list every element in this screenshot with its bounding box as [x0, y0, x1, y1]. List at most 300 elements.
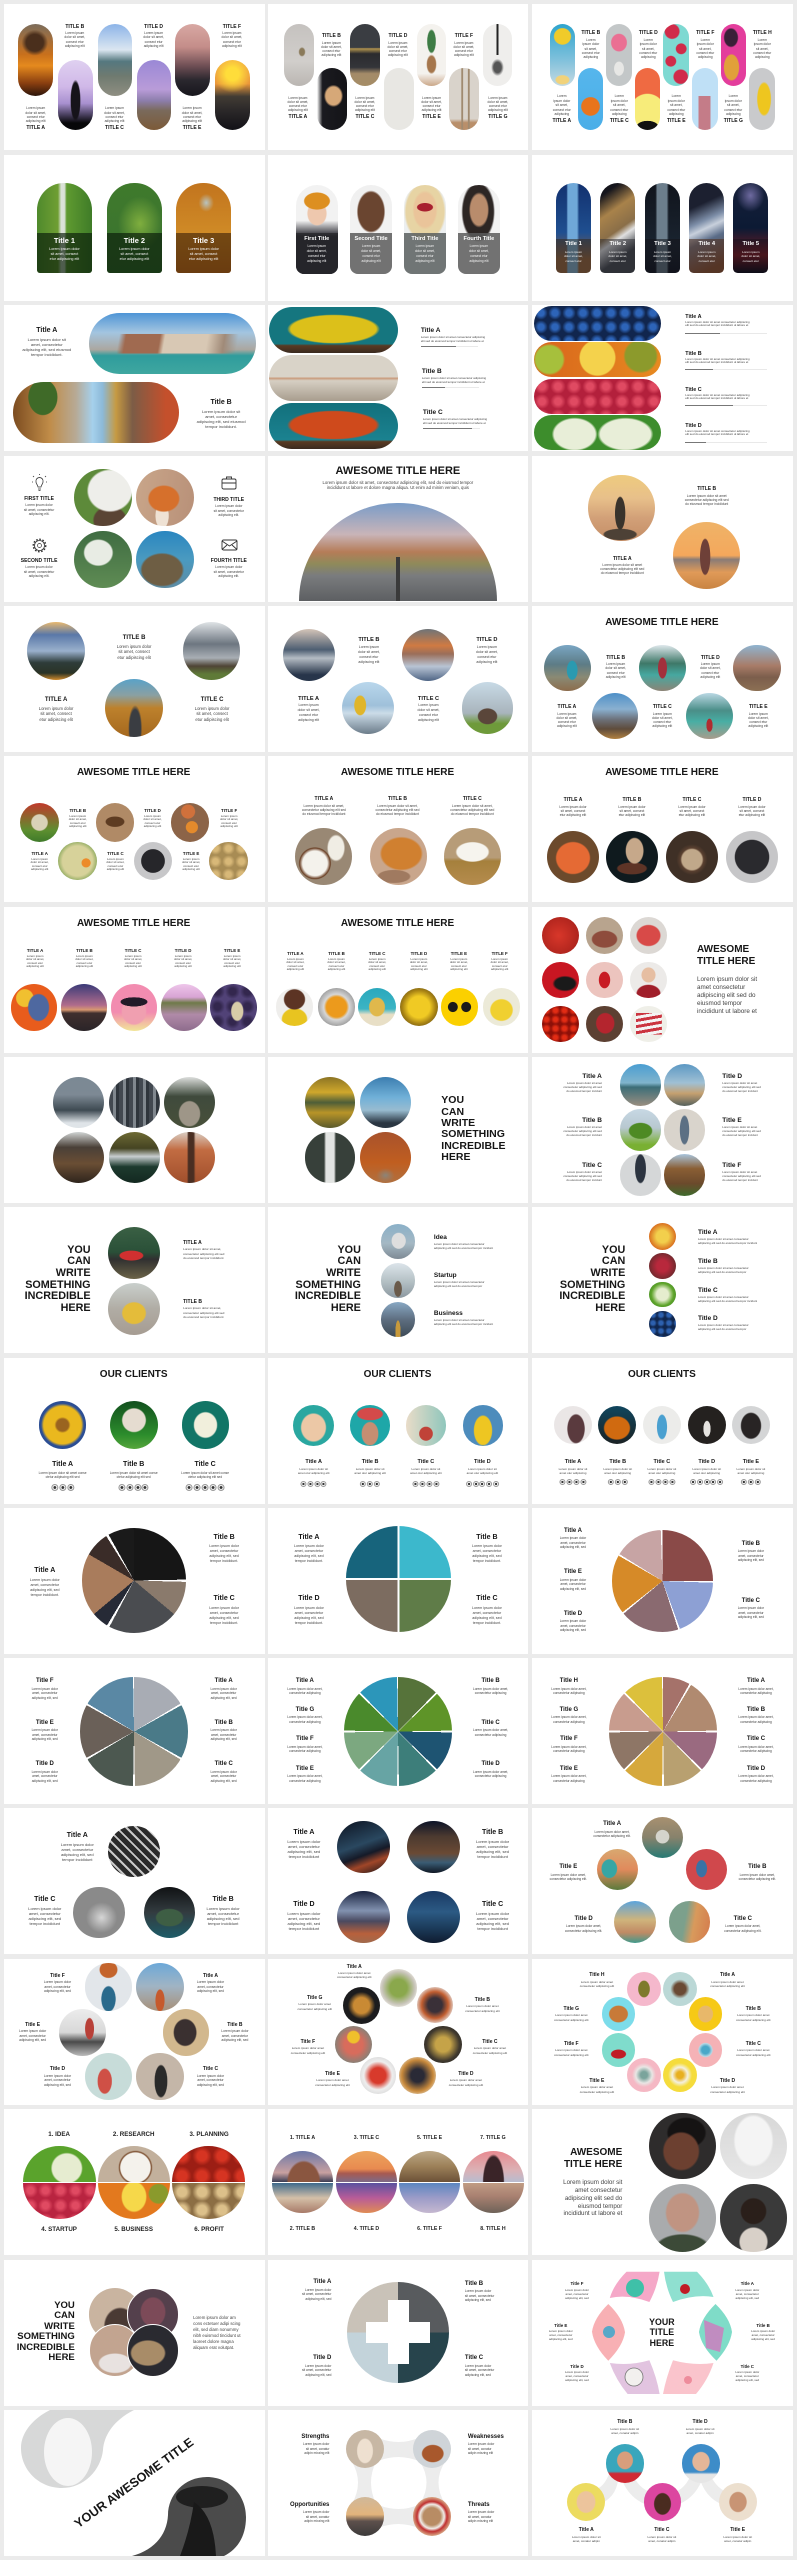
photo: avocado on pink circle [627, 1972, 661, 2006]
text: title E: consect etur [667, 108, 685, 112]
text: title B: consectetur adipiscing elit [465, 2009, 500, 2013]
photo: eggs plate on pink circle [627, 2058, 661, 2092]
text: title C: amet, consectetur [29, 1911, 61, 1916]
chart: petals [532, 2260, 793, 2406]
panel: diagonal title with two portrait blobs [4, 2410, 265, 2556]
text: title E: Title E [730, 2527, 745, 2533]
shape: grey zigzag connectors [532, 2410, 792, 2556]
photo: vespa circle [642, 1817, 683, 1858]
panel: five faces zigzag [532, 2410, 793, 2556]
text: title E: consectetur adipiscing [553, 1779, 585, 1783]
text: title A [698, 1229, 757, 1245]
text: title D: dolor sit amet, [143, 817, 162, 821]
text: title D: amet otur adipiscing elit [467, 1471, 498, 1475]
text: title C: consectetur adipiscing elit [736, 2053, 770, 2057]
photo: smiling man on blue circle [682, 2444, 720, 2483]
text: title C: consect etur [653, 720, 671, 724]
text: title D: adipiscing elit [476, 660, 497, 664]
heading: AWESOME [570, 2147, 622, 2158]
text: title D: consect etur [701, 671, 719, 675]
panel: four portraits with headline [532, 2109, 793, 2255]
text: title B: sit amet, consect [620, 809, 644, 813]
heading: YOU [54, 2300, 75, 2311]
text: title C: Lorem ipsum dolor sit amet consectetur adipiscing [423, 416, 487, 420]
text: title A: do eiusmod tempor incididunt [601, 571, 644, 575]
photo: peak climber circle [592, 693, 638, 739]
text: title D [32, 1761, 58, 1783]
text: title B: adipiscing elit [328, 967, 345, 971]
panel: five traveller circles with heading [532, 606, 793, 752]
text: title E: adipiscing elit, sed [549, 2337, 573, 2341]
text: title G: Lorem ipsum dolor amet [555, 2013, 587, 2017]
photo: rail tracks circle [346, 2497, 384, 2536]
text: title B: amet, consectetur [205, 414, 237, 419]
text: title D: adipiscing elit [410, 967, 428, 971]
text: title B: Title B [698, 1258, 718, 1265]
panel: three architecture circles [4, 1808, 265, 1954]
text: title A [286, 951, 304, 972]
text: title B: Title B [609, 1459, 626, 1465]
text: title A [30, 1567, 60, 1598]
text: title C: Title C [482, 1901, 503, 1908]
text: title B: TITLE B [76, 948, 93, 953]
text: title C: Lorem ipsum [369, 957, 386, 961]
text: title B: Lorem ipsum dolor [117, 644, 151, 649]
text: weaknesses: adipin mixzing elit [468, 2451, 493, 2455]
text: title C: do eiusmod tempor incidunt [566, 1178, 602, 1182]
text: title A: consect etur [299, 713, 318, 717]
text: title B: consect etur [607, 671, 625, 675]
text: title E: TITLE E [224, 948, 240, 953]
arch: autumn trees, title 3 [176, 183, 231, 273]
text: title C [724, 1916, 761, 1933]
text: title B: dolor sit amet, [321, 45, 342, 49]
text: title B: Lorem ipsum [359, 644, 379, 648]
photo: avocado plate circle [380, 1969, 417, 2007]
text: title F: adipiscing elit, sed [565, 2296, 589, 2300]
text: intro [322, 480, 474, 490]
text: title G: Lorem ipsum dolor amet, [287, 1715, 323, 1719]
text: title D: TITLE D [742, 797, 761, 803]
text: title C: sit amet, consectetur [465, 2368, 494, 2372]
arch: blue tower [556, 183, 591, 273]
text: title G: adipiscing [726, 112, 741, 116]
text: title D: consect etur [145, 821, 160, 825]
panel: four mountain circles [268, 606, 528, 752]
text: title B: etur adipiscing elit [619, 813, 645, 817]
text: title H: consect etur [753, 51, 771, 55]
text: title A: Title A [34, 1567, 55, 1574]
text: title D: amet, consectetur [44, 2078, 71, 2082]
text: strengths: Lorem ipsum dolor [303, 2442, 329, 2446]
text: title D: Lorem ipsum [411, 957, 427, 961]
text: title B [603, 1459, 632, 1475]
text: title E: adipiscing elit, sed [32, 1737, 58, 1741]
text: title E: dolor sit amet, [182, 860, 200, 864]
text: title C: dolor sit amet, [368, 960, 386, 964]
text: title B: Lorem ipsum dolor [221, 2029, 249, 2033]
chart: eight slice aerial pie [344, 1677, 452, 1786]
arch: man with sunglasses: Lorem ipsum [362, 244, 380, 248]
photo: orange peaks circle [402, 629, 454, 681]
chart: six slice mountain pie [80, 1677, 188, 1786]
text: title H: ipsum dolor [754, 42, 771, 46]
text: title B: Lorem ipsum dolor sit [202, 409, 240, 414]
text: title B: Lorem ipsum [76, 954, 93, 958]
text: title B [472, 1534, 502, 1564]
arch: man with sunglasses: dolor sit amet, [361, 249, 381, 253]
text: title C: adipiscing elit, sed [28, 1916, 61, 1921]
text: fourth title: sit amet, consectetur [214, 570, 244, 574]
heading [532, 1245, 625, 1315]
text: title E [737, 1459, 765, 1475]
text: title F: amet, consectetur [32, 1691, 57, 1695]
text: title C [417, 696, 439, 723]
text: title A: Title A [565, 1459, 581, 1465]
text: title D: sit amet, consect [740, 809, 764, 813]
text: title B: Lorem ipsum dolor [751, 2329, 775, 2333]
text: title B: Lorem ipsum dolor sit amet [567, 1125, 602, 1129]
text: title D: amet, consectetur [295, 1611, 323, 1615]
text: title D: etur adipiscing elit [739, 813, 765, 817]
text: second title: Lorem ipsum dolor [25, 565, 53, 569]
text: title D: consectetur adipiscing elit sed [722, 1085, 761, 1089]
text: title B: ctetur adipiscing elit sed [117, 1475, 151, 1479]
text: title D: Lorem ipsum dolor sit amet [722, 1081, 757, 1085]
text: title A: Title A [313, 2279, 331, 2285]
heading: INCREDIBLE [295, 1290, 361, 1302]
text: title F [44, 1973, 71, 1994]
photo: pink donut circle [689, 2033, 722, 2067]
text: title C: adipiscing elit [368, 967, 386, 971]
text: title C: Lorem ipsum [355, 96, 374, 100]
text: title B: TITLE B [65, 24, 84, 30]
text: title C: TITLE C [105, 125, 124, 131]
photo: citrus half [98, 2183, 170, 2219]
text: title B [563, 1117, 602, 1137]
photo: plumeria circle [182, 1401, 229, 1449]
text: title A: Lorem ipsum [27, 954, 43, 958]
photo: white hair woman circle [720, 2113, 787, 2179]
text: body: incididunt ut labore et [697, 1008, 757, 1015]
heading: OUR CLIENTS [364, 1369, 431, 1380]
text: title B: TITLE B [328, 951, 345, 956]
photo: strawberry circle [649, 1253, 676, 1279]
text: title G: Title G [560, 1707, 578, 1713]
text: title D: Title D [36, 1761, 54, 1767]
text: title B: amet, consectetur [210, 1549, 238, 1553]
text: title B: adipiscing elit, sed [751, 2337, 775, 2341]
arch: blonde woman with red sunglasses [404, 185, 446, 274]
text: title F: Lorem ipsum [454, 41, 473, 45]
text: title E: TITLE E [667, 118, 686, 124]
photo: mussels plate circle [417, 1987, 453, 2023]
text: title C: Title C [741, 2364, 754, 2369]
text: title D: Lorem ipsum [701, 662, 720, 666]
text: title F [554, 2041, 588, 2057]
text: title C: Title C [213, 1595, 235, 1602]
text: title E: consect etur [224, 961, 240, 965]
photo: coffee on teal circle [663, 1972, 697, 2006]
text: title C: Lorem ipsum [107, 857, 124, 861]
text: title B: Title B [481, 1678, 500, 1684]
text: title C [465, 2355, 494, 2377]
text: title C: Lorem ipsum dolor [28, 1906, 61, 1911]
text: title F: Title F [571, 2281, 583, 2286]
photo: sea cliff half [463, 2183, 524, 2213]
text: title D: Lorem ipsum dolor sit amet consectetur [698, 1323, 749, 1327]
text: title A: Title A [582, 1073, 602, 1080]
text: title B: adipiscing elit, sed [209, 1554, 239, 1558]
text: title C: Lorem ipsum dolor [197, 2074, 224, 2078]
text: title A: Lorem [557, 94, 566, 98]
text: title B: tempor incididunt [477, 1854, 508, 1859]
text: title A: TITLE A [289, 114, 307, 120]
arch: forest, title 2 [107, 183, 162, 273]
text: threats: Lorem ipsum dolor [468, 2510, 494, 2514]
text: title A: amet, consectetur [736, 2292, 759, 2296]
text: title D [710, 2078, 745, 2094]
text: title E: Title E [560, 1766, 578, 1772]
text: title A: adipiscing elit, sed eiusmod [22, 347, 71, 352]
text: title B [75, 948, 93, 969]
photo: red cake circle [586, 1006, 623, 1042]
text: title C: TITLE C [463, 796, 482, 802]
text: startup: Startup [434, 1272, 457, 1279]
text: title C [472, 1595, 502, 1626]
photo: waffle on yellow circle [689, 1997, 722, 2031]
text: title D: amet, consectetur [565, 2374, 588, 2378]
text: title E [549, 2323, 573, 2341]
text: title B: Title B [215, 1720, 233, 1726]
text: title C: Title C [423, 408, 443, 416]
photo: man in tank top circle [720, 2184, 787, 2252]
text: title C: consectetur adipiscing elit [473, 2051, 507, 2055]
photo: pink hair woman circle [111, 984, 157, 1031]
text: title B: Lorem ipsum dolor [209, 1544, 239, 1548]
petal: A cherries [664, 2271, 714, 2302]
text: title F [454, 33, 474, 57]
text: title E: TITLE E [451, 951, 467, 956]
text: title F: Lorem ipsum dolor amet [292, 2046, 324, 2050]
text: title A [337, 1964, 371, 1980]
text: title B: tempor incididunt [208, 1921, 238, 1926]
text: title B: adipiscing elit, sed [221, 2038, 248, 2042]
text: title C [450, 796, 494, 816]
text: title B: adipiscing elit sed do eiusmod tempor [698, 1270, 746, 1274]
text: title A [61, 1832, 94, 1862]
text: title B [736, 2006, 770, 2022]
text: title B: TITLE B [183, 1299, 202, 1305]
text: title D: dolor sit amet, [143, 35, 164, 39]
text: title C: Lorem ipsum dolor sit [648, 2534, 676, 2538]
text: title D: TITLE D [639, 30, 658, 36]
arch: dark skyscraper: Lorem ipsum [654, 250, 671, 254]
text: title D [700, 655, 721, 679]
text: title A: adipiscing elit [288, 108, 308, 112]
heading: SOMETHING [296, 1279, 361, 1291]
text: title C: consectetur adipiscing elit sed [450, 808, 494, 812]
text: title C: Lorem [615, 94, 624, 98]
photo: woman with goggles circle [719, 2483, 757, 2521]
photo: red gift circle [630, 917, 667, 954]
text: title C: Lorem ipsum dolor [735, 2370, 759, 2374]
text: title C [354, 96, 375, 120]
panel: four-quadrant pie [268, 1508, 528, 1654]
text: title B: do eiusmod tempor incididunt [183, 1315, 224, 1319]
panel: seven plates ring [268, 1959, 528, 2105]
panel: four split landscape circles [268, 2109, 528, 2255]
text: title D: Lorem ipsum [144, 31, 163, 35]
text: title B: Title B [465, 2281, 483, 2287]
text: title D [467, 1459, 498, 1475]
panel: six pastel petals around title [532, 2260, 793, 2406]
text: title B: do eiusmod tempor incidunt [566, 1133, 602, 1137]
panel: eight-slice aerial pie [268, 1658, 528, 1804]
text: title H: sit amet, [756, 47, 769, 51]
text: title C: tempor incididunt [477, 1926, 508, 1931]
text: title A: Title A [347, 1964, 362, 1970]
heading: TITLE [650, 2327, 674, 2337]
text: title A: Lorem ipsum [287, 957, 304, 961]
social icons: title A [559, 1479, 587, 1485]
text: title C: Title C [685, 386, 702, 392]
text: strengths: adipin mixzing elit [304, 2451, 329, 2455]
text: title B: elit sed do eiusmod tempor incididunt ut labore et [422, 380, 485, 384]
text: title A: adipiscing elit, sed [735, 2296, 759, 2300]
arch: bridge lights: dolor sit amet, [697, 254, 716, 258]
arch: dark skyscraper [645, 183, 680, 273]
text: title B: sit amet, consect [118, 649, 150, 654]
text: title F: dolor sit amet, [454, 45, 474, 49]
petal: F pink woman [610, 2271, 660, 2302]
photo: yellow sofa pill [269, 307, 398, 353]
panel: overlapping team circles with headline [4, 2260, 265, 2406]
arch: blonde woman with red sunglasses: consect etur [416, 254, 434, 258]
text: title A: Lorem ipsum dolor amet [711, 1980, 744, 1984]
photo: basket circle [444, 828, 501, 885]
text: title D [638, 30, 658, 59]
photo: apple circle [649, 1282, 676, 1307]
text: title A: Lorem ipsum [26, 106, 45, 110]
text: title H [752, 30, 772, 59]
text: title B: Lorem ipsum dolor sit amet consectetur adipiscing [422, 376, 486, 380]
text: title C: TITLE C [107, 851, 124, 856]
text: title B: Lorem ipsum dolor amet [466, 2004, 499, 2008]
text: title A: TITLE A [613, 556, 632, 562]
text: title C: consect etur [369, 964, 385, 968]
text: second title: adipiscing elit. [29, 574, 49, 578]
photo: papaya on aqua circle [602, 1997, 635, 2031]
label: 8. title H: 8. TITLE H [480, 2226, 506, 2232]
text: third title: THIRD TITLE [214, 496, 244, 502]
text: title H: Lorem ipsum dolor amet [581, 1980, 613, 1984]
text: title B: tempor incididunt. [473, 1559, 501, 1563]
heading: WRITE [326, 1267, 361, 1279]
text: title E [722, 1117, 761, 1137]
text: business [434, 1310, 493, 1326]
text: title B: Lorem ipsum dolor sit amet conse [110, 1471, 158, 1475]
panel: six urban circles with side titles [532, 1057, 793, 1203]
text: title A: adipiscing elit sed do eiusmod tempor incidunt [698, 1241, 757, 1245]
text: title A: Lorem ipsum [298, 703, 319, 707]
text: title C: sit amet, consect [196, 711, 228, 716]
text: title B: Lorem ipsum dolor sit amet [687, 494, 727, 498]
text: title G: TITLE G [488, 114, 507, 120]
text: title C: Title C [203, 2066, 218, 2072]
text: title C [28, 1896, 61, 1926]
text: title A: ctetur adipiscing elit sed [46, 1475, 80, 1479]
text: title B: adipiscing elit [606, 675, 626, 679]
photo: pumpkin circle [598, 1406, 636, 1444]
text: title D [685, 423, 750, 436]
social icons: title E [741, 1479, 761, 1485]
text: title B: Title B [476, 1534, 498, 1541]
text: title B: dolor sit amet, [327, 960, 346, 964]
text: title A: amet, consectetur [30, 1583, 59, 1587]
social icons: title D [465, 1481, 499, 1487]
text: title F [551, 1736, 587, 1754]
text: title C: adipiscing elit, sed [209, 1616, 239, 1620]
panel: five colourful circles with heading [4, 907, 265, 1053]
text: title H [580, 1972, 614, 1988]
text: title E: TITLE E [749, 704, 768, 710]
photo: pink peak half [463, 2151, 524, 2182]
text: title A: elit sed do eiusmod tempor incididunt ut labore et [685, 323, 748, 327]
text: title B: consectetur adipiscing [740, 1720, 772, 1724]
text: first title: adipiscing elit. [29, 512, 49, 516]
text: title C: consectetur adipiscing [740, 1749, 772, 1753]
text: title D: Lorem ipsum dolor [44, 2074, 71, 2078]
text: title F: TITLE F [223, 24, 241, 30]
text: title C: Lorem ipsum dolor sit amet conse [181, 1471, 229, 1475]
text: title C [473, 2039, 507, 2055]
heading: YOU [441, 1094, 464, 1106]
text: title G: ipsum dolor [725, 99, 742, 103]
text: title A: TITLE A [26, 125, 45, 131]
text: title B: Lorem ipsum dolor sit amet consectetur [698, 1266, 749, 1270]
photo: red wall circle [686, 1849, 727, 1890]
text: title F: Lorem ipsum dolor [44, 1980, 71, 1984]
heading: AWESOME TITLE HERE [336, 464, 460, 476]
text: title A: Title A [747, 1678, 765, 1684]
text: title F: consectetur adipiscing [289, 1749, 321, 1753]
text: title D: do eiusmod tempor incidunt [722, 1089, 758, 1093]
chart: circle cut by white cross [347, 2282, 449, 2383]
text: title F: consectetur adipiscing [553, 1749, 585, 1753]
bar: title B progress [422, 387, 479, 388]
text: title D: adipiscing elit, sed [288, 1921, 320, 1926]
text: title E: do eiusmod tempor incidunt [722, 1133, 758, 1137]
text: title A: TITLE A [558, 704, 576, 710]
text: title C [195, 696, 229, 722]
text: title C: adipiscing elit, sed [197, 2083, 224, 2087]
text: title C: Title C [194, 1461, 216, 1468]
text: title F: amet, consectetur [44, 1985, 71, 1989]
text: title D [449, 2071, 483, 2087]
text: title G: Lorem ipsum [488, 96, 507, 100]
text: title B [210, 1720, 237, 1742]
text: title F: adipiscing elit, sed [44, 1989, 71, 1993]
text: title E: Lorem ipsum dolor sit [737, 1467, 765, 1471]
photo: hiker sunrise circle [588, 475, 655, 541]
text: title D: adipiscing elit, sed [560, 1628, 586, 1632]
photo: flyover night circle [337, 1891, 390, 1943]
arch: forest, title 2: sit amet, consect [121, 252, 148, 256]
text: title B: Title B [685, 350, 702, 356]
text: title B [751, 2323, 775, 2341]
text: title A: Lorem ipsum dolor sit amet, [304, 804, 344, 808]
